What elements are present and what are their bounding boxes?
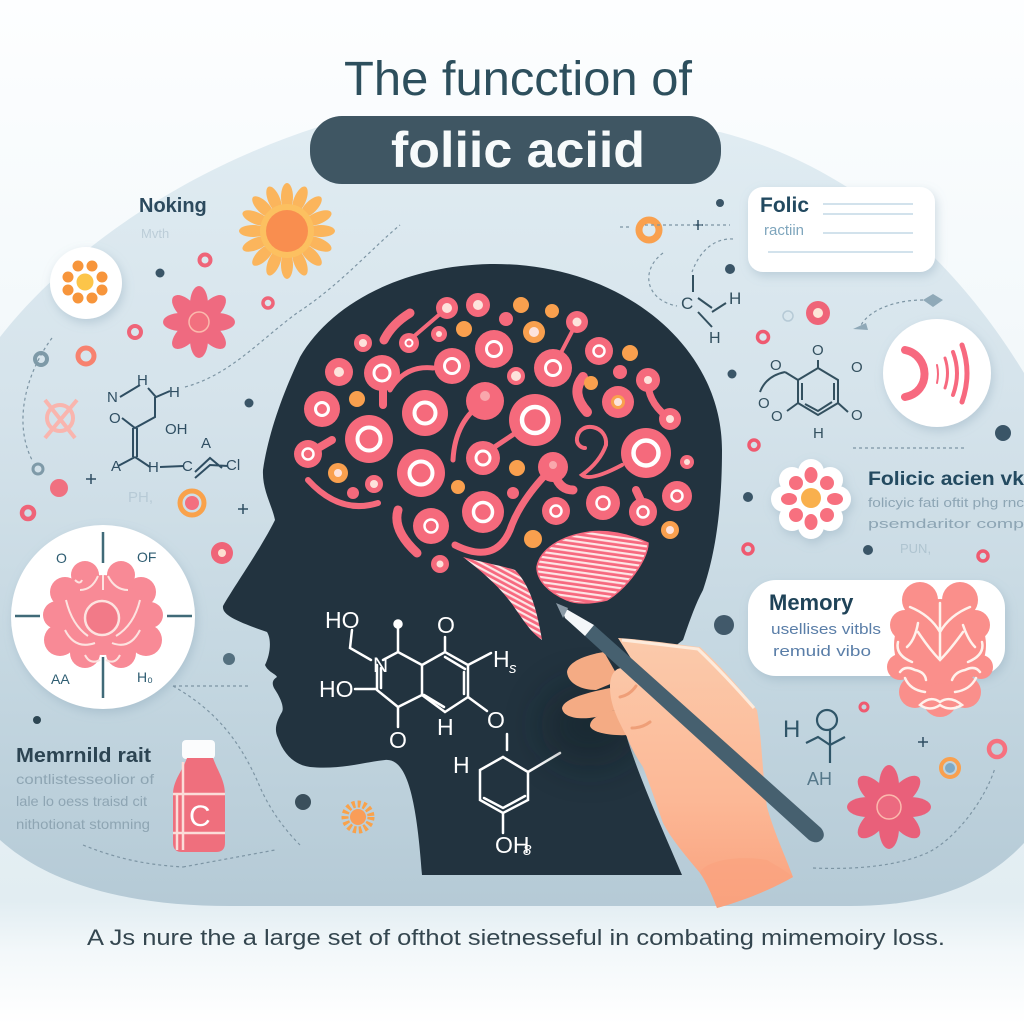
molecule lower right [783,710,845,789]
molecule labels: O [389,727,407,753]
molecule labels: O [437,612,455,638]
icon: small orange flower [345,804,371,830]
text: Noking [139,195,207,241]
molecule labels: O [487,707,505,733]
molecule labels: OH [495,832,530,858]
left molecule labels: H [148,459,159,476]
dotted paths [23,225,995,868]
molecule labels [319,607,532,859]
fingers [562,652,628,735]
left circle brain [11,525,195,709]
left molecule labels: H [137,372,148,389]
text: folic acid note: folicyic fati oftit phg rnc [868,495,1024,510]
memory card: usellises vitbls [771,621,881,638]
icon: orange flower in circle [50,247,122,319]
memory card [748,580,1005,717]
left molecule labels: C [182,458,193,475]
decorative dots [33,199,1011,810]
top right card: Folic [748,187,935,272]
molecule left [118,385,228,478]
text: folic acid note: PUN, [900,541,931,556]
molecule labels: 8 [523,842,532,859]
small molecule top right [681,275,741,347]
pen [585,625,824,842]
left circle brain: H₀ [137,669,153,685]
left circle brain: AA [51,671,70,687]
molecule labels: H [493,646,510,672]
title: The funcction of [344,53,693,106]
memory card: Memory [769,590,854,615]
left text block: Memrnild rait [16,745,151,767]
background blob [0,127,1024,906]
left molecule labels: OH [165,421,188,438]
left circle brain: O [56,550,67,566]
molecule right [760,360,848,415]
molecule labels: HO [319,676,354,702]
icon: sun [239,183,335,279]
molecule labels: N [373,654,388,677]
molecule lower right: AH [807,769,832,789]
brain stem [463,557,542,640]
faded pink icon [45,400,77,438]
left molecule labels: N [107,389,118,406]
bottle [173,740,225,852]
left molecule labels: A [201,435,211,452]
sound circle [883,319,991,427]
text: folic acid note: Folicic acien vk [868,469,1024,490]
left molecule labels: Cl [226,457,240,474]
right molecule labels: O [770,357,782,374]
molecule lower right: H [783,716,800,743]
brain nodes [294,293,694,573]
right molecule labels: O [771,408,783,425]
molecule labels: H [437,714,454,740]
left molecule labels: A [111,458,121,475]
molecule on head [350,620,560,833]
memory card: remuid vibo [773,643,871,660]
molecule labels: H [453,752,470,778]
bottle: C [189,800,211,833]
title pill [310,116,721,184]
left text block: lale lo oess traisd cit [16,793,147,809]
molecule labels: HO [325,607,360,633]
brain illustration [294,293,694,640]
text: Noking: Mvth [141,226,169,241]
right molecule labels: O [812,342,824,359]
head silhouette [223,264,722,875]
text: folic acid note: psemdaritor comp [868,516,1024,531]
icon: brain [887,582,993,717]
left molecule labels: O [109,410,121,427]
text: Noking: Noking [139,195,207,217]
small molecule top right: C [681,294,693,313]
left text block: nithotionat stomning [16,816,150,832]
left molecule labels [107,372,240,506]
left circle brain: OF [137,549,156,565]
decorative rings [22,220,1005,777]
left text block [16,745,154,832]
left text block: contlistesseolior of [16,771,154,787]
brain connectors [308,308,670,553]
flower right [771,459,851,539]
right molecule labels: O [851,359,863,376]
left molecule labels: PH, [128,489,153,506]
hand shadow [540,683,640,767]
right molecule labels: H [813,425,824,442]
right molecule labels: O [851,407,863,424]
molecule labels: s [509,660,517,677]
hand with pen [556,603,824,908]
text: folic acid note [868,469,1024,556]
right molecule labels [758,342,863,442]
right molecule labels: O [758,395,770,412]
icon: pink flower [163,286,235,358]
icon: pink flower lower right [847,765,931,849]
small molecule top right: H [709,330,721,347]
cerebellum striped [537,532,648,603]
top right card: Folic: ractiin [764,222,804,239]
small molecule top right: H [729,289,741,308]
title pill: foliic aciid [391,122,645,178]
top right card: Folic: Folic [760,194,809,217]
bottom caption: A Js nure the a large set of ofthot sietnesseful in combating mimemoiry loss. [87,925,945,950]
left molecule labels: H [169,384,180,401]
